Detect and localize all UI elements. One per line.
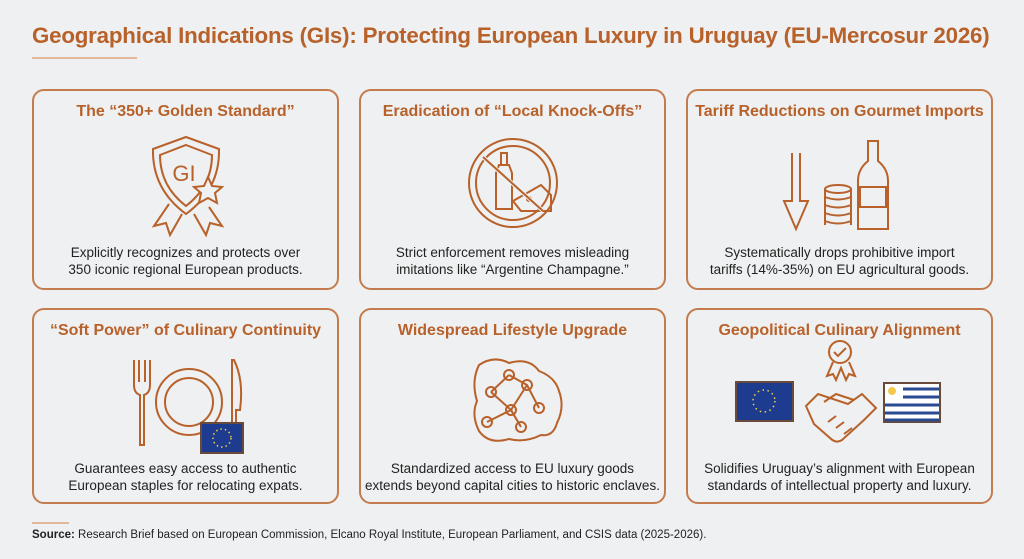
panel: golden standard [32,89,339,290]
panel: geopolitical: standards of intellectual property and luxury. [708,478,971,493]
panel: tariffs: tariffs (14%-35%) on EU agricultural goods. [710,262,969,277]
panel: golden standard: The “350+ Golden Standard” [76,103,295,120]
panel: tariffs [686,89,993,290]
panel: tariffs: Systematically drops prohibitive import [724,245,955,260]
panel: lifestyle: extends beyond capital cities to historic enclaves. [365,478,660,493]
panel: geopolitical [686,308,993,504]
panel: soft power: Guarantees easy access to authentic [74,461,297,476]
icon: map with pins [473,358,563,442]
icon: flags, handshake, rosette [735,340,941,443]
icon: GI shield badge: GI [172,161,196,186]
panel: knock-offs: Eradication of “Local Knock-Offs” [383,103,642,120]
panel: soft power: European staples for relocating expats. [68,478,303,493]
panel: golden standard: Explicitly recognizes and protects over [71,245,300,260]
title: Geographical Indications (GIs): Protecting European Luxury in Uruguay (EU-Mercosur 2026) [32,23,989,48]
panel: knock-offs: Strict enforcement removes misleading [396,245,629,260]
panel: knock-offs: imitations like “Argentine Champagne.” [396,262,629,277]
source footer: Source: Research Brief based on European Commission, Elcano Royal Institute, European Parliament, and CSIS data (2025-2026). [32,529,706,541]
icon: GI shield badge [152,136,224,238]
panel: soft power [32,308,339,504]
panel: tariffs: Tariff Reductions on Gourmet Imports [695,103,984,120]
panel: lifestyle: Standardized access to EU luxury goods [391,461,634,476]
icon: prohibited bottle and cheese [468,138,558,228]
panel: lifestyle: Widespread Lifestyle Upgrade [398,322,627,339]
panel: geopolitical: Geopolitical Culinary Alignment [718,322,961,339]
panel: soft power: “Soft Power” of Culinary Continuity [50,322,321,339]
icon: arrow, coins, bottle [782,140,889,232]
icon: plate, cutlery, EU flag [133,359,244,454]
panel: knock-offs [359,89,666,290]
panel: geopolitical: Solidifies Uruguay’s alignment with European [704,461,975,476]
panel: lifestyle [359,308,666,504]
panel: golden standard: 350 iconic regional European products. [68,262,303,277]
